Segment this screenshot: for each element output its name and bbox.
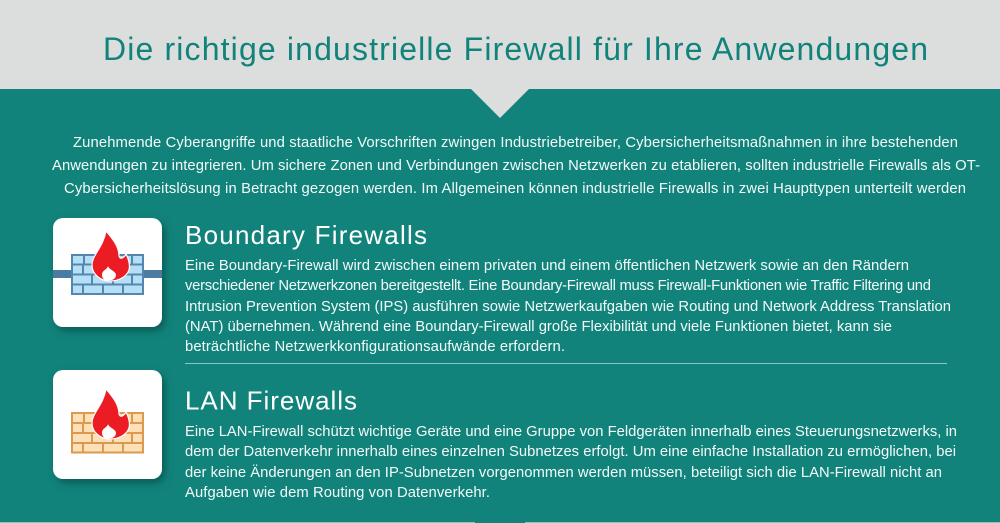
intro text: Anwendungen zu integrieren. Um sichere Zonen und Verbindungen zwischen Netzwerken zu etablieren, sollten industrielle Firewalls als OT- bbox=[52, 158, 980, 174]
body: LAN Firewalls bbox=[185, 424, 957, 501]
intro text: Zunehmende Cyberangriffe und staatliche Vorschriften zwingen Industriebetreiber, Cybersicherheitsmaßnahmen in ihre bestehenden bbox=[73, 135, 958, 151]
body: LAN Firewalls: Eine LAN-Firewall schützt wichtige Geräte und eine Gruppe von Feldgeräten innerhalb eines Steuerungsnetzwerks, in bbox=[185, 424, 957, 440]
icon: network pipe bbox=[53, 270, 162, 278]
intro text: Cybersicherheitslösung in Betracht gezogen werden. Im Allgemeinen können industrielle Firewalls in zwei Haupttypen unterteilt werden bbox=[64, 181, 966, 197]
icon: flame bbox=[92, 389, 129, 439]
body: LAN Firewalls: Aufgaben wie dem Routing von Datenverkehr. bbox=[185, 485, 490, 501]
body: Boundary Firewalls: (NAT) übernehmen. Während eine Boundary-Firewall große Flexibilität und viele Funktionen bietet, kann sie bbox=[185, 319, 892, 335]
icon card: boundary firewall bbox=[53, 218, 162, 327]
body: Boundary Firewalls: beträchtliche Netzwerkkonfigurationsaufwände erfordern. bbox=[185, 339, 565, 355]
body: Boundary Firewalls bbox=[185, 258, 951, 355]
body: LAN Firewalls: der keine Änderungen an den IP-Subnetzen vorgenommen werden müssen, beteiligt sich die LAN-Firewall nicht an bbox=[185, 464, 942, 481]
body: Boundary Firewalls: verschiedener Netzwerkzonen bereitgestellt. Eine Boundary-Firewall muss Firewall-Funktionen wie Traffic Filtering und bbox=[185, 278, 931, 294]
heading: Boundary Firewalls: Boundary Firewalls bbox=[185, 220, 427, 250]
heading: LAN Firewalls: LAN Firewalls bbox=[185, 386, 357, 416]
body: Boundary Firewalls: Eine Boundary-Firewall wird zwischen einem privaten und einem öffentlichen Netzwerk sowie an den Rändern bbox=[185, 258, 909, 274]
body: Boundary Firewalls: Intrusion Prevention System (IPS) ausführen sowie Netzwerkaufgaben wie Routing und Network Address Translation bbox=[185, 299, 951, 315]
icon: blue brick wall bbox=[71, 254, 144, 294]
body: LAN Firewalls: dem der Datenverkehr innerhalb eines einzelnen Subnetzes erfolgt. Um eine einfache Installation zu ermöglichen, bei bbox=[185, 444, 956, 460]
title: Die richtige industrielle Firewall für Ihre Anwendungen bbox=[103, 31, 928, 67]
icon: flame bbox=[92, 231, 129, 281]
icon: orange brick wall bbox=[71, 412, 144, 453]
icon card: LAN firewall bbox=[53, 370, 162, 479]
header band with pointer bbox=[0, 0, 1000, 118]
intro text bbox=[52, 135, 980, 197]
